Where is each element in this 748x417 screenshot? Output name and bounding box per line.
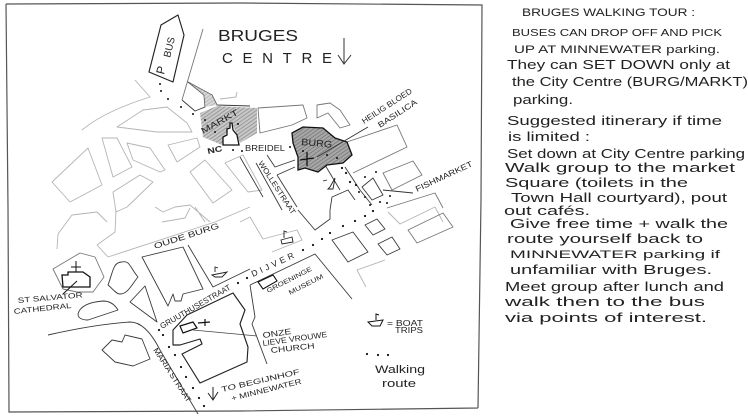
- map: streets and blocks: [48, 29, 453, 414]
- P BUS parking: P: [153, 65, 169, 76]
- notes: suggested itinerary: Square (toilets in the: [505, 175, 688, 190]
- street and place labels: MUSEUM: [288, 273, 325, 297]
- street and place labels: DIJVER: [250, 250, 296, 279]
- street and place labels: OUDE BURG: [153, 221, 220, 251]
- notes: suggested itinerary: [503, 113, 745, 325]
- map frame: [6, 3, 482, 412]
- icon: basilica cross: [300, 152, 314, 166]
- title: Bruges Centre: CENTRE: [222, 50, 332, 67]
- notes: suggested itinerary: route yourself back to: [507, 231, 703, 246]
- notes: bus parking: BUSES CAN DROP OFF AND PICK: [512, 28, 722, 39]
- notes: suggested itinerary: Give free time + walk the: [510, 216, 728, 231]
- notes: suggested itinerary: MINNEWATER parking if: [510, 249, 722, 261]
- faint street blocks: [52, 80, 443, 287]
- street and place labels: [13, 86, 474, 404]
- dark street blocks: [48, 29, 453, 414]
- handwritten notes: [503, 7, 748, 325]
- street and place labels: CATHEDRAL: [13, 301, 72, 316]
- notes: suggested itinerary: Meet group after lunch and: [505, 279, 724, 294]
- Markt square: MARKT: [199, 107, 240, 136]
- street and place labels: GRUUTHUSESTRAAT: [158, 283, 232, 331]
- legend: walking route: Walking: [375, 364, 425, 376]
- street and place labels: + MINNEWATER: [230, 377, 303, 403]
- notes: bus parking: parking.: [513, 92, 573, 107]
- notes: suggested itinerary: via points of interest.: [505, 310, 707, 325]
- P BUS parking: [149, 15, 184, 82]
- icon: town hall: [223, 123, 239, 145]
- street and place labels: FISHMARKET: [414, 159, 474, 194]
- notes: bus parking: the City Centre (BURG/MARKT): [512, 74, 748, 89]
- notes: suggested itinerary: Walk group to the market: [505, 160, 736, 175]
- walking route dots: [158, 83, 391, 407]
- icon: Groeninge museum: [258, 275, 277, 289]
- notes: bus parking: UP AT MINNEWATER parking.: [514, 44, 720, 56]
- notes heading: BRUGES WALKING TOUR :: [522, 7, 695, 19]
- title: Bruges Centre: [218, 28, 332, 67]
- leader lines: [317, 127, 413, 193]
- notes: suggested itinerary: unfamiliar with Bruges.: [510, 262, 712, 277]
- street and place labels: MARIA STRAAT: [151, 346, 193, 404]
- notes: suggested itinerary: Town Hall courtyard), pout: [511, 190, 728, 205]
- street and place labels: LIEVE VROUWE: [262, 330, 328, 348]
- street and place labels: GROENINGE: [266, 265, 314, 295]
- notes: bus parking: They can SET DOWN only at: [507, 57, 730, 72]
- legend: walking route: [366, 353, 425, 390]
- street and place labels: BREIDEL: [245, 144, 286, 153]
- street and place labels: TO BEGIJNHOF: [220, 367, 301, 394]
- legend: walking route: route: [382, 378, 416, 390]
- legend: boat trips: = BOAT: [387, 319, 423, 328]
- P BUS parking: BUS: [162, 36, 178, 59]
- notes: suggested itinerary: Set down at City Centre parking: [507, 146, 745, 161]
- notes: suggested itinerary: walk then to the bus: [503, 294, 706, 309]
- Burg square: BURG: [301, 137, 333, 151]
- icon: St Salvator cathedral: [62, 261, 90, 294]
- arrow: to Begijnhof: [208, 387, 218, 400]
- street and place labels: WOLLESTRAAT: [256, 159, 298, 216]
- street and place labels: ONZE: [262, 327, 292, 340]
- arrow: north: [338, 38, 351, 64]
- notes: suggested itinerary: Suggested itinerary if time: [507, 113, 722, 128]
- icon: boat stops: [212, 178, 335, 277]
- street and place labels: CHURCH: [270, 341, 315, 355]
- notes: suggested itinerary: is limited :: [508, 129, 590, 144]
- Markt square: [188, 82, 257, 145]
- icon: Onze Lieve Vrouwe church: [180, 319, 257, 336]
- notes: bus parking: [507, 28, 748, 107]
- notes: suggested itinerary: out cafés.: [504, 203, 590, 218]
- street and place labels: HEILIG BLOED: [360, 86, 414, 126]
- title: Bruges Centre: BRUGES: [218, 28, 298, 45]
- legend: boat trips: [368, 314, 423, 335]
- legend: boat trips: TRIPS: [395, 326, 423, 335]
- street and place labels: BASILICA: [376, 97, 420, 130]
- street and place labels: ST SALVATOR: [17, 290, 84, 305]
- street and place labels: NC: [207, 144, 223, 156]
- Burg square: [292, 127, 352, 172]
